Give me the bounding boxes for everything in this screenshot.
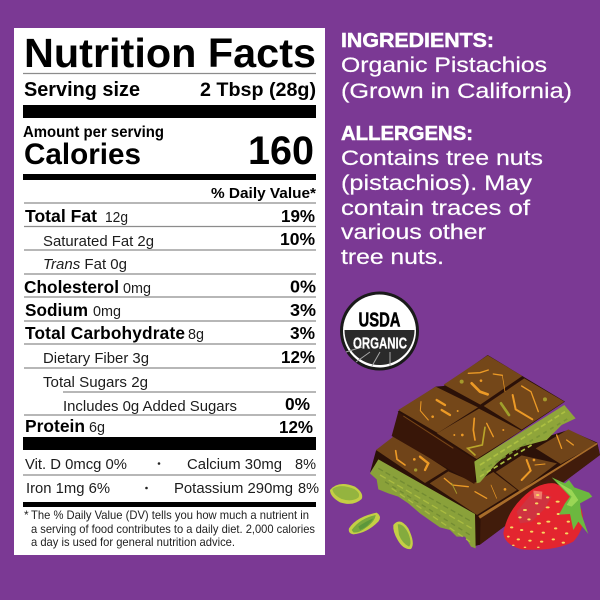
row: total fat: 12g — [105, 209, 128, 226]
text block: ingredients: (Grown in California) — [341, 79, 572, 103]
calories block: Amount per serving — [23, 124, 164, 141]
text block: ingredients: Organic Pistachios — [341, 53, 547, 77]
panel: nutrition facts label — [14, 28, 325, 555]
row: saturated fat: 10% — [280, 229, 315, 249]
row: cholesterol: 0mg — [123, 280, 151, 297]
row: iron and potassium — [26, 480, 319, 497]
row: total carbohydrate: 8g — [188, 326, 204, 343]
text block: allergens: contain traces of — [341, 196, 530, 220]
row: vitamin D and calcium: 8% — [295, 456, 316, 473]
row: vitamin D and calcium: Vit. D 0mcg 0% — [25, 456, 127, 473]
serving size row: 2 Tbsp (28g) — [200, 79, 316, 101]
row: total carbohydrate — [25, 323, 315, 343]
row: protein: Protein — [25, 416, 85, 436]
row: total carbohydrate: Total Carbohydrate — [25, 323, 185, 343]
text block: allergens: ALLERGENS: — [341, 123, 473, 145]
footnote: * — [24, 508, 29, 522]
text block: allergens: (pistachios). May — [341, 171, 532, 195]
serving size row — [24, 79, 316, 101]
heading: Nutrition Facts: Nutrition Facts — [24, 30, 316, 76]
illustration: strawberry — [503, 477, 592, 550]
row: total fat: Total Fat — [25, 206, 97, 226]
row: cholesterol: 0% — [290, 276, 316, 296]
row: sodium — [25, 300, 316, 320]
calories block: Calories — [24, 138, 141, 171]
row: iron and potassium: Potassium 290mg — [174, 480, 293, 497]
text block: allergens: Contains tree nuts — [341, 146, 543, 170]
illustration: strawberry leaves — [552, 477, 592, 534]
text block: allergens — [341, 123, 543, 269]
row: cholesterol — [24, 276, 316, 297]
icon: USDA organic seal — [340, 292, 419, 370]
row: sodium: 3% — [290, 300, 316, 320]
row: sodium: 0mg — [93, 303, 121, 320]
row: saturated fat: Saturated Fat 2g — [43, 233, 154, 250]
row: vitamin D and calcium — [25, 456, 316, 473]
text block: allergens: tree nuts. — [341, 245, 444, 269]
row: added sugars — [63, 394, 310, 415]
icon: USDA organic seal: USDA — [358, 308, 401, 332]
row: protein: 12% — [279, 417, 313, 437]
icon: USDA organic seal: ORGANIC — [353, 336, 407, 352]
row: sodium: Sodium — [25, 300, 88, 320]
illustration: pistachios — [330, 484, 413, 549]
daily value header: % Daily Value* — [211, 185, 316, 202]
illustration: lower bar pistachio filling — [370, 459, 476, 548]
illustration: orange drizzle on chocolate — [396, 370, 573, 498]
text block: ingredients: INGREDIENTS: — [341, 30, 494, 52]
footnote — [24, 508, 315, 549]
row: total carbohydrate: 3% — [290, 323, 315, 343]
row: vitamin D and calcium: Calcium 30mg — [187, 456, 282, 473]
row: cholesterol: Cholesterol — [24, 277, 119, 297]
row: trans fat: Trans Fat 0g — [43, 256, 127, 273]
row: added sugars: Includes 0g Added Sugars — [63, 398, 237, 415]
row: total fat: 19% — [281, 206, 315, 226]
row: protein — [25, 416, 313, 437]
calories block: 160 — [248, 129, 314, 173]
calories block — [23, 124, 314, 173]
footnote: The % Daily Value (DV) tells you how much a nutrient in — [31, 508, 309, 522]
row: dietary fiber: Dietary Fiber 3g — [43, 350, 149, 367]
row: iron and potassium: Iron 1mg 6% — [26, 480, 110, 497]
row: dietary fiber: 12% — [281, 347, 315, 367]
text block: ingredients — [341, 30, 572, 103]
footnote: a serving of food contributes to a daily diet. 2,000 calories — [31, 522, 315, 536]
row: saturated fat — [43, 229, 315, 250]
illustration: lower chocolate bar — [370, 429, 600, 548]
row: iron and potassium: 8% — [298, 480, 319, 497]
row: added sugars: 0% — [285, 394, 310, 414]
footnote: a day is used for general nutrition advice. — [31, 535, 235, 549]
row: total sugars: Total Sugars 2g — [43, 374, 148, 391]
serving size row: Serving size — [24, 79, 140, 101]
row: protein: 6g — [89, 419, 105, 436]
illustration: upper chocolate bar — [392, 355, 576, 484]
row: dietary fiber — [43, 347, 315, 367]
row: total fat — [25, 206, 315, 226]
text block: allergens: various other — [341, 220, 486, 244]
illustration: upper bar pistachio filling — [474, 405, 576, 483]
